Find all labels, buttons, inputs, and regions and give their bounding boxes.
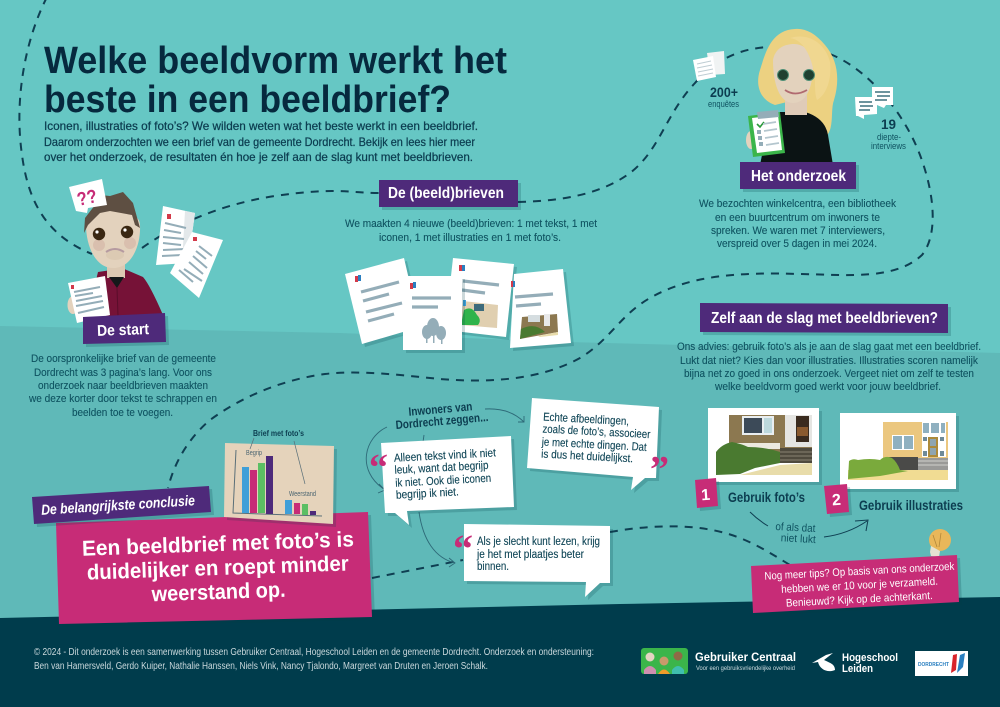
- dashed route line: [19, 0, 933, 578]
- label: gebruik foto's: Gebruik foto’s: [728, 489, 805, 505]
- conclusion box: Een beeldbrief met foto’s is: [82, 527, 354, 561]
- quote bubble 1: Alleen tekst vind ik niet: [394, 447, 497, 465]
- title: beste in een beeldbrief?: [44, 79, 451, 121]
- icon: question marks bubble: ??: [75, 186, 99, 211]
- illustration: letter with icons: [403, 276, 462, 350]
- badge: number 2: 2: [832, 492, 842, 509]
- conclusion box: duidelijker en roept minder: [86, 551, 350, 585]
- heading: het onderzoek: [740, 162, 856, 189]
- stat: 200+ enquetes: 200+: [710, 84, 738, 100]
- panel: quotes: [366, 398, 669, 597]
- quote bubble 2: je met echte dingen. Dat: [541, 436, 648, 454]
- illustration: letter with text: [345, 258, 420, 344]
- intro text: Iconen, illustraties of foto’s? We wilden weten wat het beste werkt in een beeldbrief.: [44, 119, 478, 133]
- quote bubble 1: “: [369, 447, 388, 489]
- background: darker teal band: [0, 326, 1000, 640]
- arrows from heading to quotes: [366, 409, 524, 567]
- label: gebruik illustraties: Gebruik illustraties: [859, 497, 963, 513]
- illustration: letter with photo: [510, 269, 571, 348]
- text: het onderzoek: [699, 198, 896, 250]
- chart card: brief met foto's: Weerstand: [289, 489, 316, 498]
- chart card: brief met foto's: Brief met foto’s: [253, 429, 304, 438]
- quote bubble 3: binnen.: [477, 561, 509, 573]
- logo: gebruiker centraal: [641, 648, 796, 674]
- icon: loose pages: [156, 206, 223, 298]
- heading: de start: De start: [97, 321, 149, 340]
- badge: number 2: [824, 484, 849, 514]
- illustration: woman with clipboard: [746, 29, 837, 165]
- intro text: Daarom onderzochten we een brief van de gemeente Dordrecht. Bekijk en lees hier meer: [44, 135, 475, 149]
- logo: hogeschool leiden: Leiden: [842, 663, 873, 675]
- heading: zelf aan de slag: Zelf aan de slag met beeldbrieven?: [711, 310, 938, 327]
- text: de start: beelden toe te voegen.: [72, 407, 173, 419]
- text: het onderzoek: spreken. We waren met 7 interviewers,: [711, 225, 885, 237]
- logo: dordrecht: [915, 651, 968, 676]
- quote bubble 2: [527, 398, 669, 491]
- text: advies: welke beeldvorm goed werkt voor jouw beeldbrief.: [714, 381, 941, 393]
- footer credits text: Ben van Hamersveld, Gerdo Kuiper, Nathalie Hanssen, Niels Vink, Nancy Tjalondo, Margreet van Druten en Jeroen Schalk.: [34, 661, 488, 672]
- badge: number 1: 1: [701, 487, 711, 504]
- callout: nog meer tips: Nog meer tips? Op basis van ons onderzoek: [764, 561, 955, 583]
- footer credits text: © 2024 - Dit onderzoek is een samenwerking tussen Gebruiker Centraal, Hogeschool Leiden en de gemeente Dordrecht. Onderzoek en ondersteuning:: [34, 647, 594, 658]
- text: de start: Dordrecht was 3 pagina’s lang. Voor ons: [34, 367, 212, 379]
- stat: 200+ enquetes: [708, 84, 739, 109]
- stat: 200+ enquetes: enquêtes: [708, 99, 739, 109]
- quote bubble 3: je het met plaatjes beter: [476, 549, 584, 561]
- logo: gebruiker centraal: Voor een gebruiksvriendelijke overheid: [696, 666, 795, 672]
- stat: 19 diepte-interviews: interviews: [871, 141, 906, 151]
- text: de start: we deze korter door tekst te schrappen en: [28, 393, 217, 405]
- text: de start: onderzoek naar beeldbrieven maakten: [38, 380, 208, 392]
- heading: zelf aan de slag: [700, 303, 948, 333]
- card: illustration of house: [840, 413, 956, 489]
- intro text: over het onderzoek, de resultaten én hoe je zelf aan de slag kunt met beeldbrieven.: [44, 150, 473, 164]
- text: het onderzoek: en een buurtcentrum om inwoners te: [715, 212, 880, 224]
- footer: [34, 647, 968, 676]
- text: advies: Lukt dat niet? Kies dan voor illustraties. Illustraties scoren namelijk: [680, 355, 978, 367]
- arrow: of als dat niet lukt: niet lukt: [780, 532, 816, 546]
- quote bubble 1: ik niet. Ook die iconen: [395, 473, 491, 490]
- panel: het onderzoek: [693, 29, 906, 250]
- text: het onderzoek: verspreid over 5 dagen in mei 2024.: [717, 238, 877, 250]
- arrow: of als dat niet lukt: of als dat: [775, 521, 816, 535]
- quote bubble 3: “: [453, 526, 473, 571]
- panel: de (beeld)brieven: [345, 180, 597, 350]
- heading: inwoners van dordrecht zeggen: Inwoners van: [408, 399, 473, 419]
- icon: question marks bubble: [69, 179, 107, 213]
- quote bubble 2: zoals de foto’s, associeer: [542, 424, 651, 441]
- text: advies: [677, 341, 981, 393]
- quote bubble 2: Echte afbeeldingen,: [543, 412, 629, 428]
- text: de start: De oorspronkelijke brief van de gemeente: [31, 353, 216, 365]
- heading: de belangrijkste conclusie: De belangrijkste conclusie: [41, 493, 195, 519]
- arrow: of als dat niet lukt: [750, 512, 868, 546]
- heading: inwoners van dordrecht zeggen: Dordrecht zeggen...: [395, 410, 489, 432]
- badge: number 1: [695, 478, 718, 508]
- quote bubble 2: is dus het duidelijkst.: [541, 448, 633, 465]
- text: de start: [28, 353, 217, 419]
- quote bubble 1: [369, 436, 514, 525]
- logo: dordrecht: DORDRECHT: [918, 662, 950, 668]
- quote bubble 1: leuk, want dat begrijp: [394, 460, 489, 477]
- heading: de (beeld)brieven: De (beeld)brieven: [388, 185, 504, 202]
- heading: de belangrijkste conclusie: [32, 486, 211, 524]
- panel: conclusie: [32, 429, 372, 624]
- icon: light bulb: [929, 529, 951, 557]
- heading: het onderzoek: Het onderzoek: [751, 168, 846, 185]
- panel: zelf aan de slag: [677, 303, 981, 613]
- text: advies: bijna net zo goed in ons onderzoek. Vergeet niet om zelf te testen: [684, 368, 974, 380]
- logo: gebruiker centraal: Gebruiker Centraal: [695, 650, 796, 664]
- conclusion box: [56, 512, 372, 624]
- conclusion box: weerstand op.: [150, 578, 286, 606]
- text: de (beeld)brieven: iconen, 1 met illustraties en 1 met foto’s.: [379, 232, 561, 244]
- card: photo of house: [708, 408, 819, 482]
- illustration: letter with illustration: [445, 258, 514, 337]
- stat: 19 diepte-interviews: 19: [881, 116, 896, 132]
- text: de (beeld)brieven: [345, 218, 597, 244]
- callout: nog meer tips: hebben we er 10 voor je verzameld.: [781, 576, 938, 596]
- text: de (beeld)brieven: We maakten 4 nieuwe (beeld)brieven: 1 met tekst, 1 met: [345, 218, 597, 230]
- stat: 19 diepte-interviews: [871, 116, 906, 151]
- intro text: [44, 119, 478, 164]
- logo: hogeschool leiden: [812, 652, 898, 675]
- stat: 19 diepte-interviews: diepte-: [877, 132, 901, 142]
- heading: de (beeld)brieven: [379, 180, 518, 207]
- title: Welke beeldvorm werkt het: [44, 40, 507, 82]
- title: [44, 40, 507, 121]
- icon: survey sheets: [693, 51, 725, 81]
- text: het onderzoek: We bezochten winkelcentra, een bibliotheek: [699, 198, 896, 210]
- heading: inwoners van dordrecht zeggen: [394, 398, 489, 432]
- quote bubble 3: Als je slecht kunt lezen, krijg: [477, 536, 600, 548]
- panel: de start: [28, 179, 223, 419]
- illustration: man holding letter: [68, 192, 163, 325]
- quote bubble 1: begrijp ik niet.: [396, 486, 459, 502]
- footer credits text: [34, 647, 594, 672]
- icon: interview speech bubbles: [855, 87, 893, 119]
- chart card: brief met foto's: [224, 429, 334, 524]
- heading: de start: [83, 313, 166, 344]
- logo: hogeschool leiden: Hogeschool: [842, 652, 898, 664]
- background: footer band: [0, 597, 1000, 707]
- chart card: brief met foto's: Begrip: [246, 448, 262, 457]
- quote bubble 2: ”: [650, 449, 669, 491]
- callout: nog meer tips: [751, 555, 959, 613]
- quote bubble 3: [453, 524, 610, 597]
- callout: nog meer tips: Benieuwd? Kijk op de achterkant.: [786, 590, 933, 610]
